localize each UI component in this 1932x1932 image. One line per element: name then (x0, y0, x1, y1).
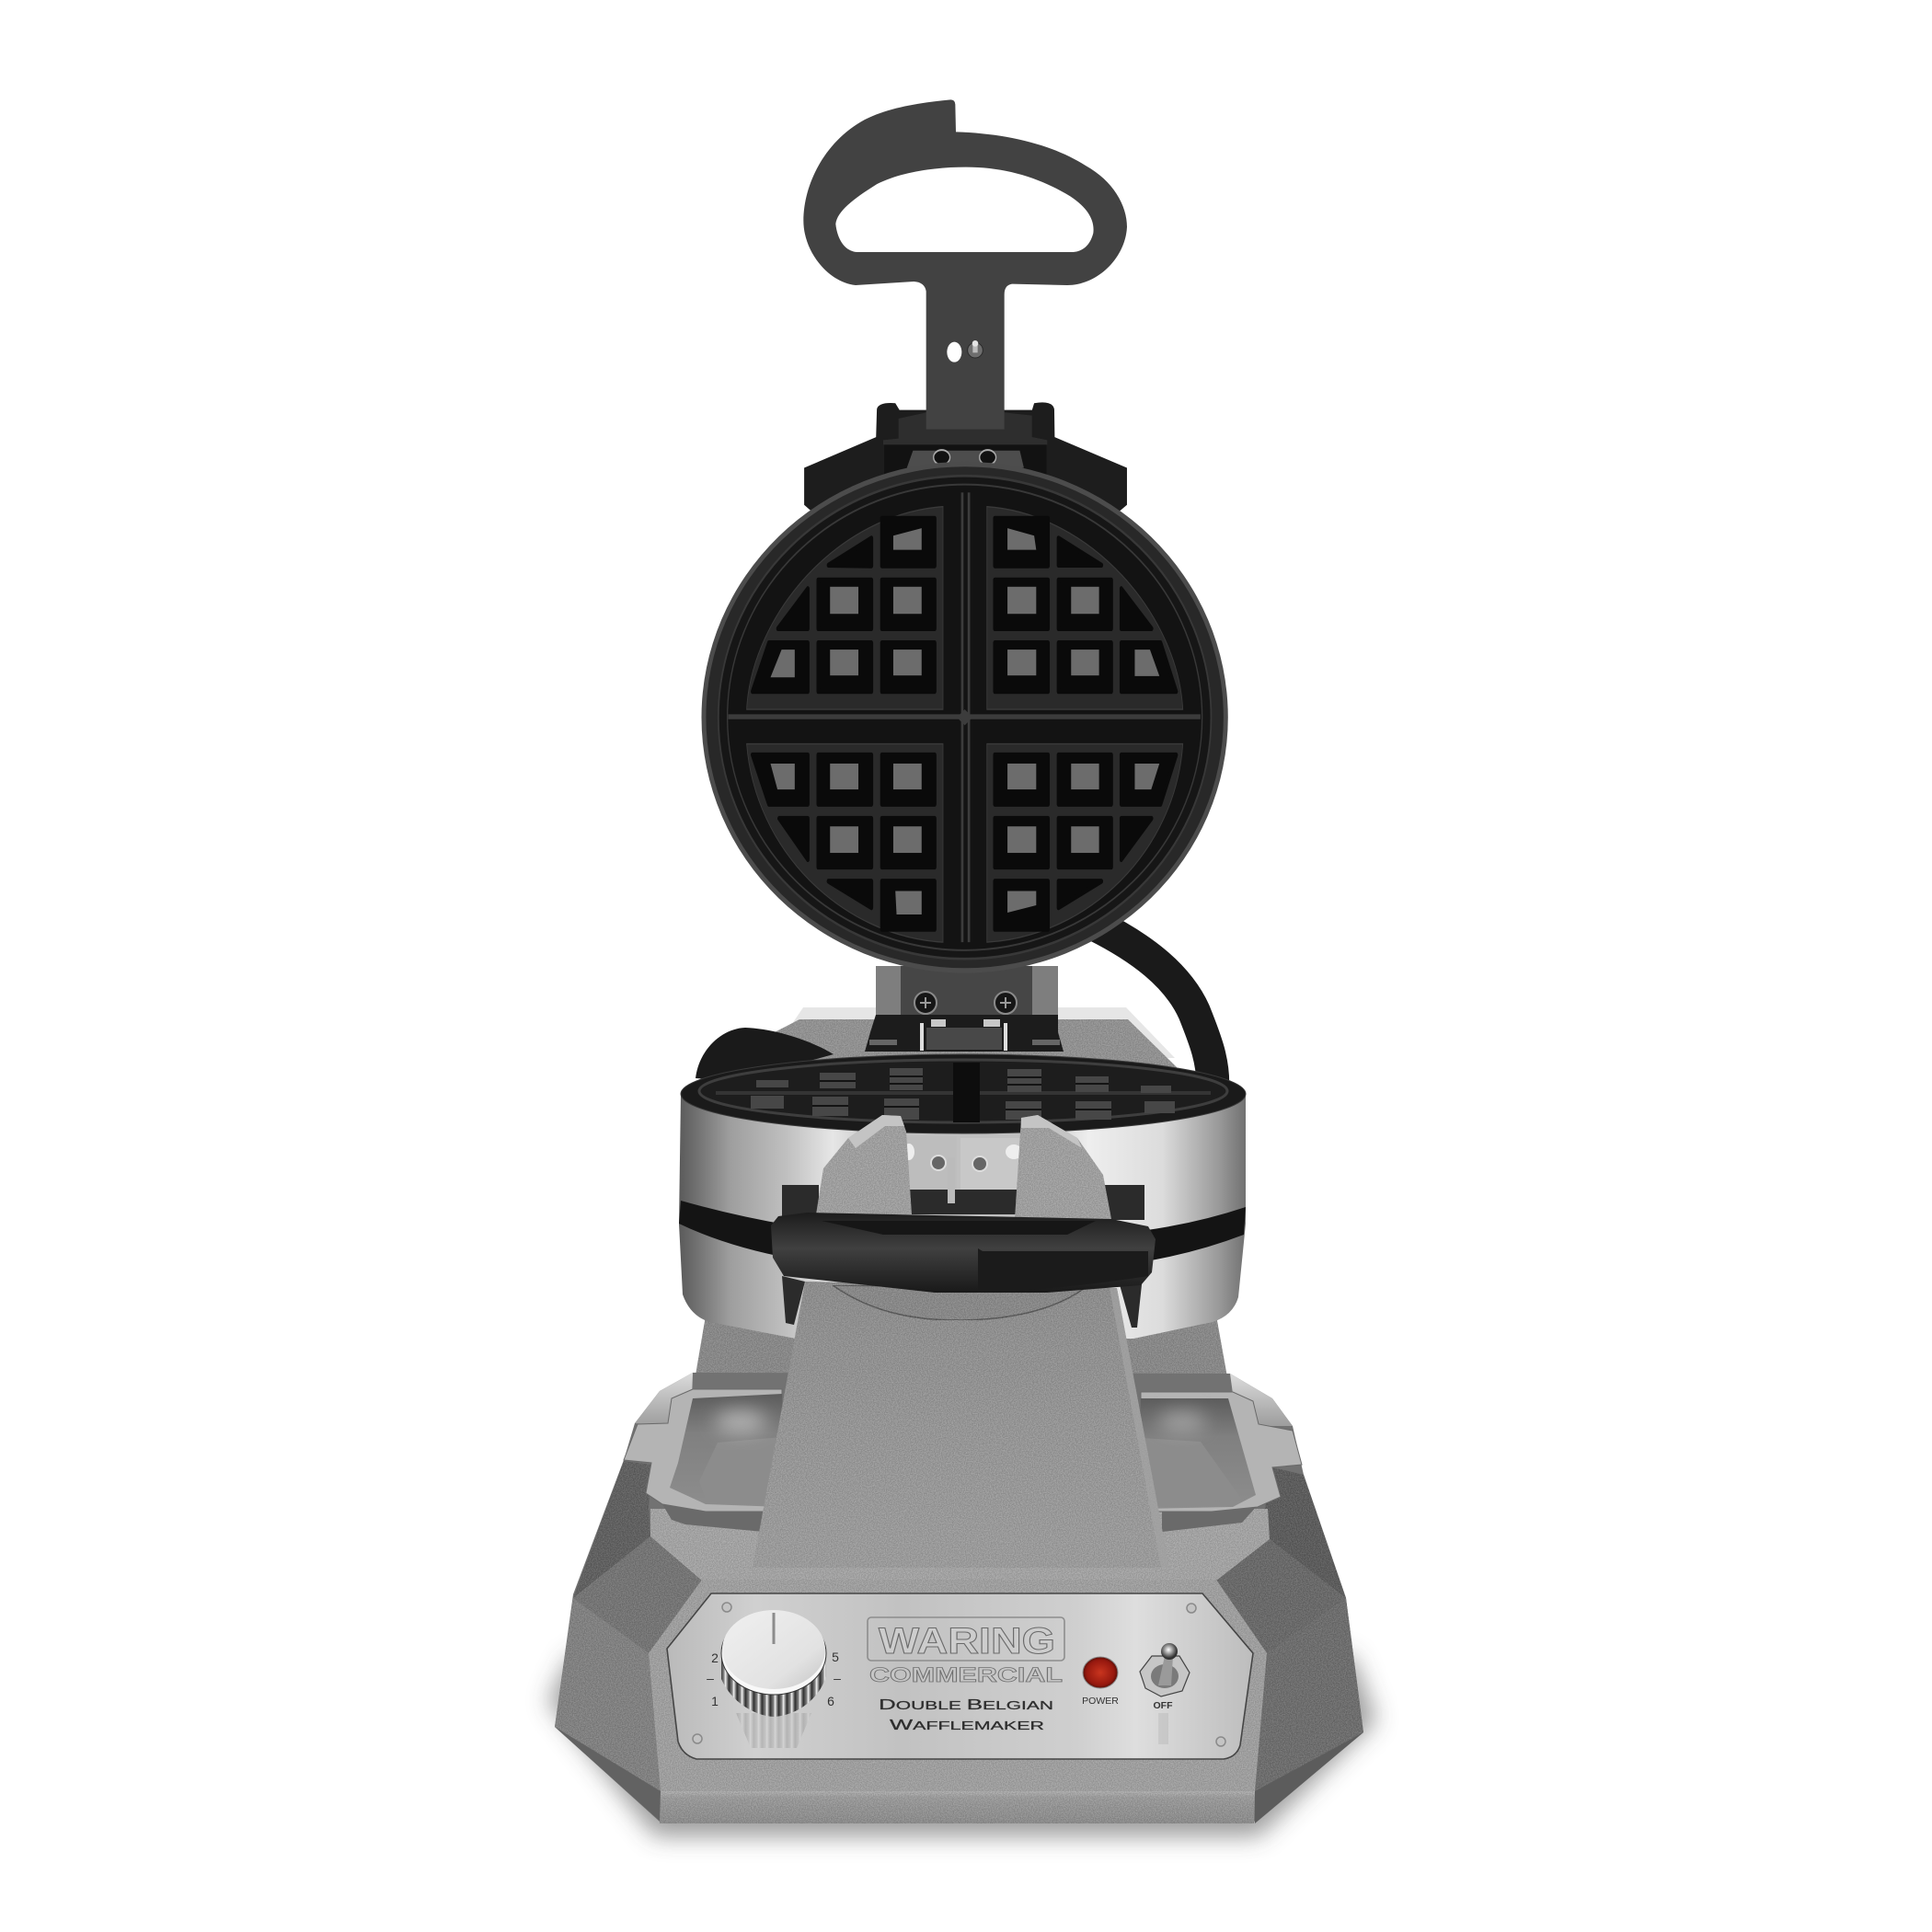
mounting slot (947, 342, 961, 362)
product name line one: D OUBLE B ELGIAN (879, 1697, 1053, 1713)
lower plate inner ring (699, 1060, 1227, 1122)
Commercial logo text: COMMERCIAL (869, 1663, 1063, 1686)
rear dark brackets (782, 1185, 1144, 1328)
rim ring inner (719, 476, 1211, 959)
right rear corner (1230, 1374, 1293, 1426)
toggle switch (1140, 1643, 1190, 1744)
right tray well (1141, 1398, 1256, 1509)
lower plate divider (716, 1091, 1211, 1095)
hinge mechanism steel plates (903, 1136, 1022, 1214)
lower plate tooth shadow lines (812, 1076, 1111, 1110)
right yoke arm (1015, 1115, 1111, 1219)
left tray highlight (715, 1410, 766, 1432)
right arm top facet (1021, 1115, 1082, 1148)
lower housing (679, 1095, 1246, 1339)
base body (555, 1373, 1363, 1823)
left drip tray (624, 1389, 782, 1532)
lower plate centre channel (953, 1063, 980, 1122)
right tray flange (1141, 1392, 1302, 1512)
right tray floor (1141, 1438, 1242, 1504)
knob scale numbers (707, 1650, 841, 1708)
left arm top facet (848, 1115, 904, 1148)
gray waffle cell floors (770, 528, 1159, 914)
Waring logo box (868, 1617, 1064, 1661)
rim ring (706, 466, 1224, 968)
knob scale numbers: – (834, 1671, 841, 1685)
hinge block behind lid (804, 402, 1127, 567)
off label: OFF (1154, 1700, 1173, 1711)
waffle plate surface (728, 485, 1202, 950)
cross channels (729, 492, 1201, 942)
right tray highlight (1158, 1411, 1206, 1432)
knob scale numbers: 6 (827, 1694, 834, 1708)
right tray body (1162, 1504, 1259, 1532)
left lower facet (555, 1598, 661, 1791)
knob scale numbers: 5 (832, 1650, 839, 1664)
plate quadrants (747, 507, 1183, 942)
knob reflection (736, 1713, 811, 1748)
rear support column (690, 1316, 1233, 1408)
tower right edge highlight (1110, 1288, 1169, 1568)
waffle cells (753, 518, 1177, 929)
left tray floor (699, 1437, 782, 1504)
upper waffle lid (701, 402, 1228, 973)
rear housing (754, 1019, 1177, 1104)
right drip tray (1141, 1392, 1302, 1532)
right power cord (1095, 925, 1213, 1090)
front steel control panel (667, 1593, 1253, 1759)
lifting handle assembly (803, 99, 1127, 444)
power label: POWER (1082, 1696, 1119, 1707)
front black handle (771, 1213, 1156, 1293)
front tower (753, 1282, 1169, 1568)
bottom plate curve (833, 1285, 1085, 1320)
left dark facet (573, 1461, 651, 1598)
rear housing halo (769, 1007, 1175, 1058)
front lip (660, 1791, 1255, 1823)
ground shadow (548, 1656, 1376, 1836)
right lower facet (1255, 1598, 1363, 1791)
power indicator light (1083, 1657, 1118, 1688)
product name line two: W AFFLEMAKER (890, 1718, 1044, 1733)
panel screws (693, 1603, 1225, 1746)
knob scale numbers: 1 (711, 1694, 719, 1708)
hinge mount (865, 966, 1064, 1052)
lower plate rim (681, 1054, 1246, 1133)
front face (649, 1580, 1267, 1791)
screw plate backing (884, 443, 1046, 480)
lifting handle (803, 99, 1127, 430)
left tray body (662, 1504, 764, 1532)
right dark facet (1265, 1467, 1346, 1598)
handle groove (822, 1221, 1096, 1235)
plate with screws (907, 450, 1024, 468)
left tray well (670, 1394, 782, 1507)
knob scale numbers: 2 (711, 1650, 719, 1665)
black seam band right (1141, 1207, 1246, 1262)
temperature knob (721, 1610, 826, 1717)
right mid facet (1216, 1539, 1346, 1653)
handle rivet (968, 340, 983, 358)
knob scale numbers: – (707, 1671, 714, 1685)
deck (650, 1509, 1270, 1581)
left power cord (696, 1028, 834, 1081)
base silhouette (555, 1373, 1363, 1822)
left mid facet (573, 1536, 702, 1653)
left rear corner (635, 1373, 693, 1426)
left corner facet (555, 1727, 661, 1822)
lower plate teeth (751, 1068, 1175, 1120)
stem base (883, 412, 1047, 444)
left yoke arm (816, 1115, 912, 1214)
Waring logo text: WARING (879, 1621, 1055, 1662)
outer rim of lid (701, 462, 1228, 973)
black seam band left (679, 1201, 791, 1259)
handle lower right block (978, 1248, 1148, 1293)
left tray flange (624, 1389, 782, 1512)
right corner facet (1255, 1732, 1363, 1823)
